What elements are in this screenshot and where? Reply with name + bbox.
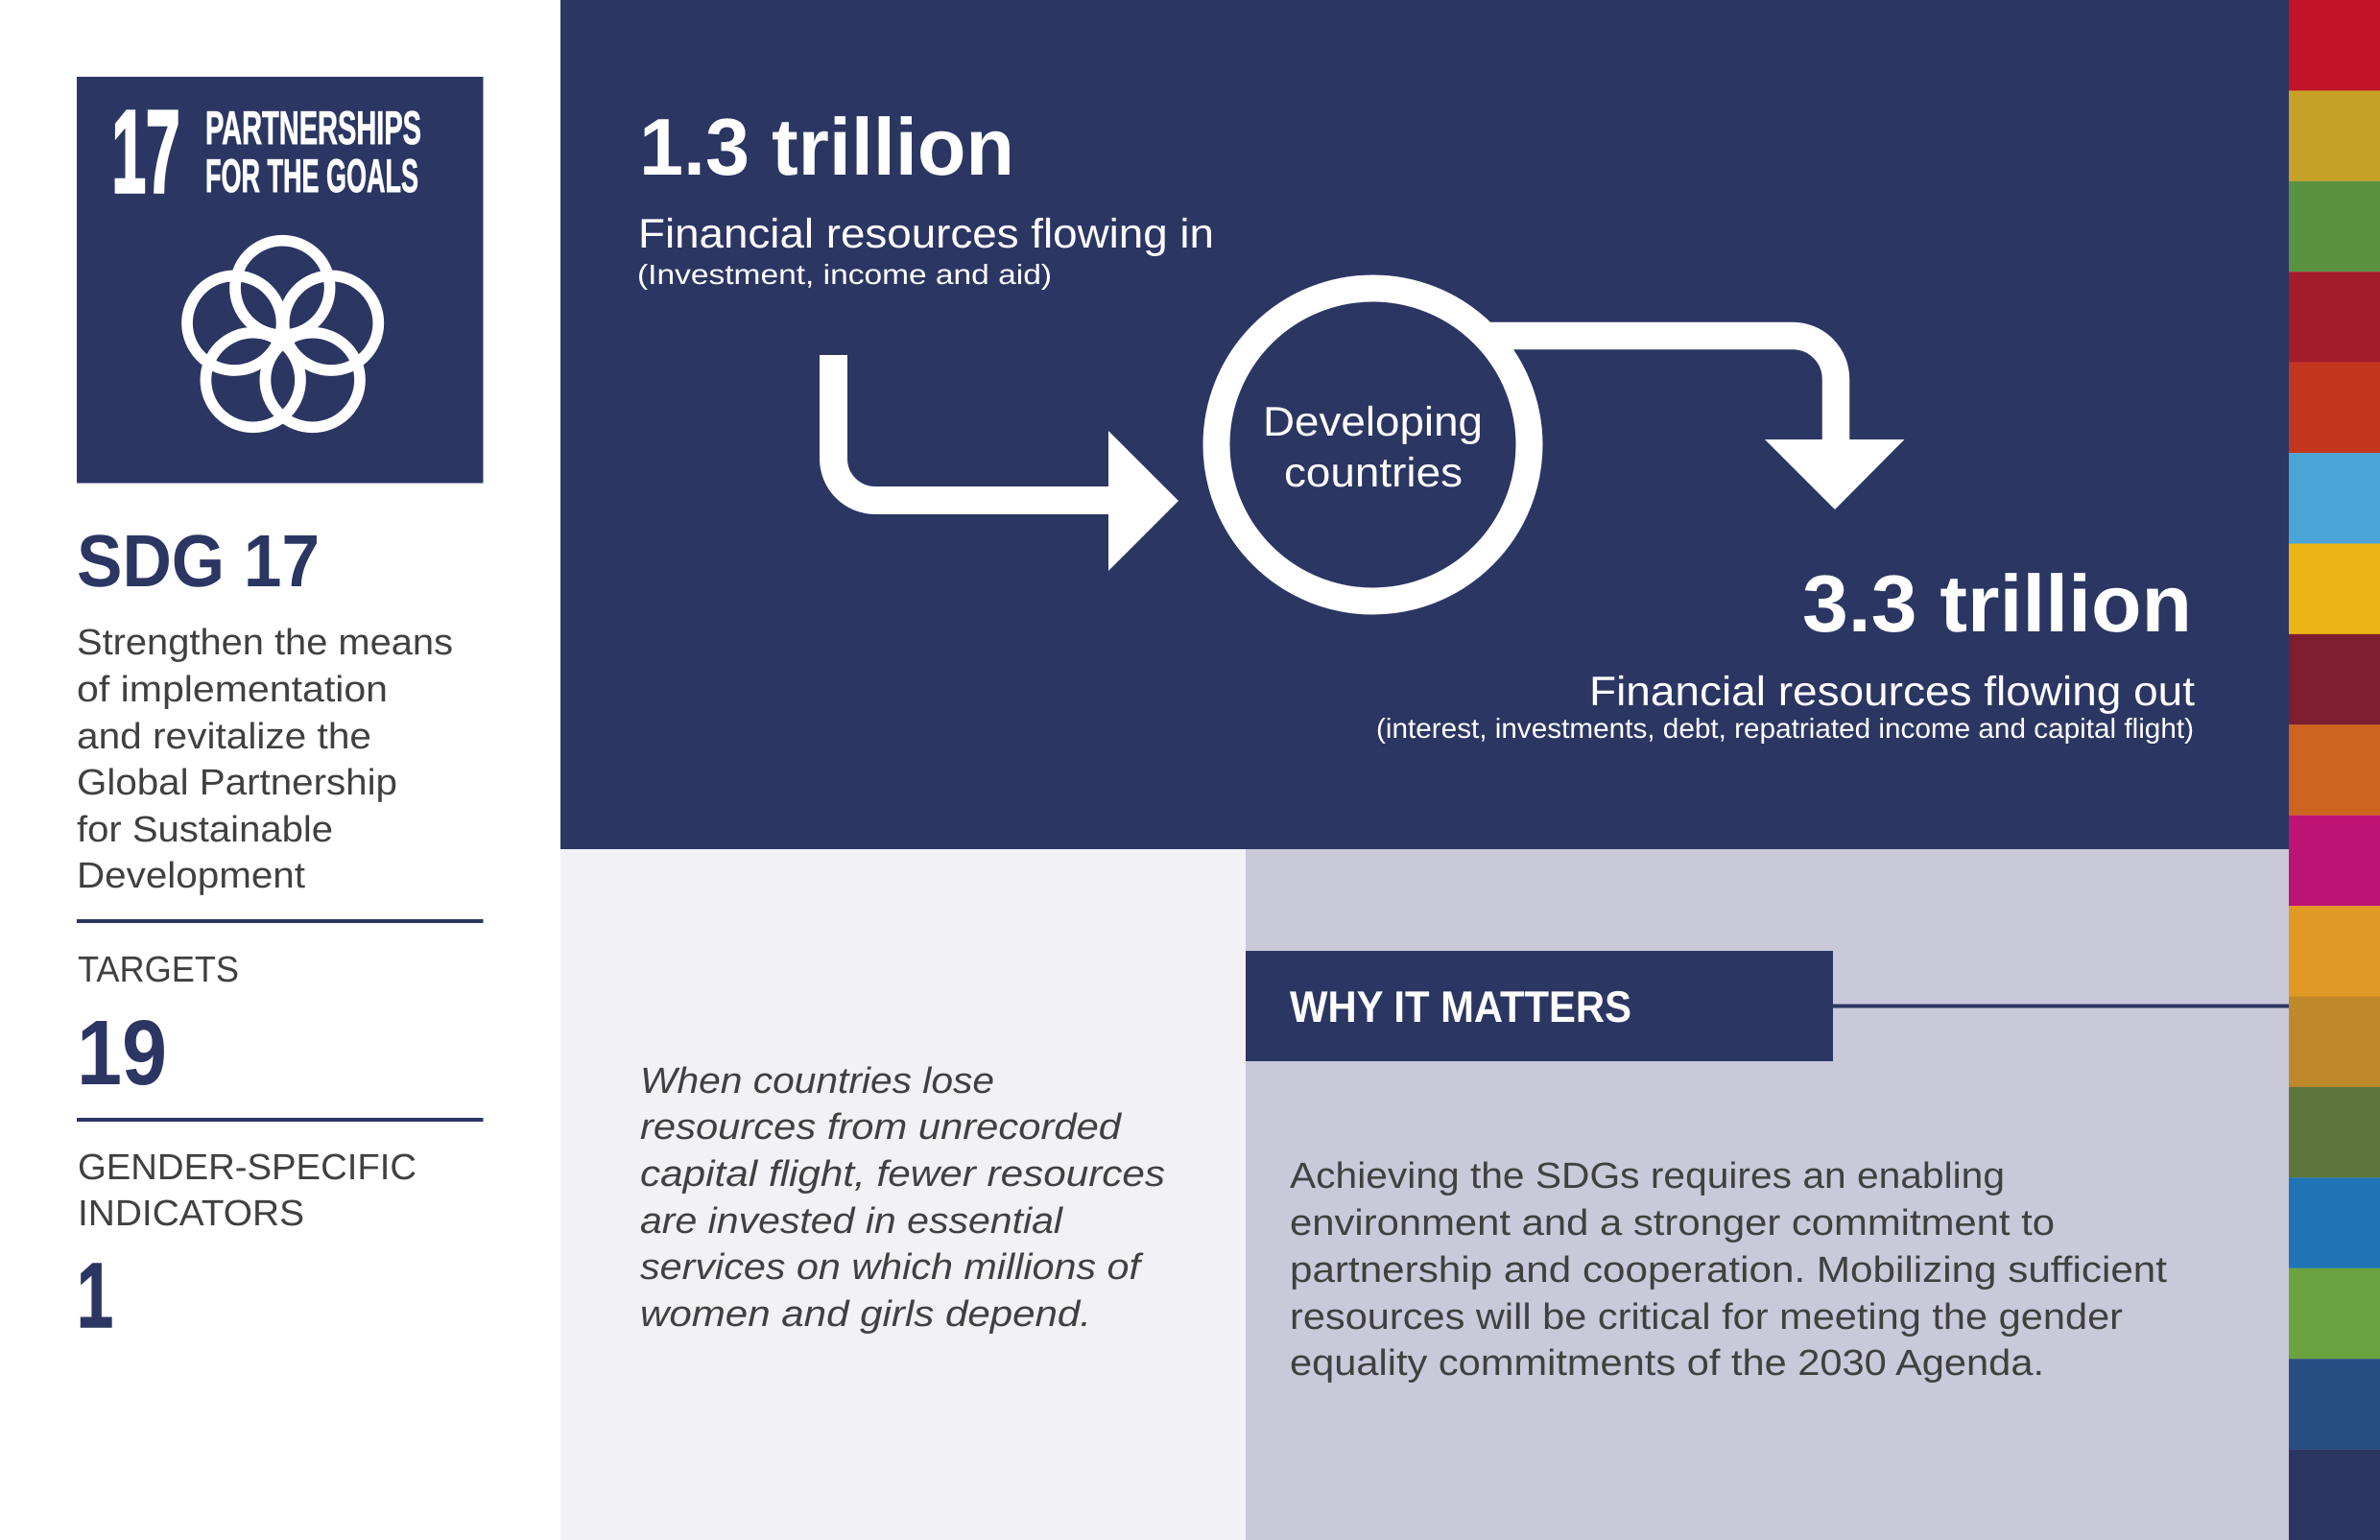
goal description: and revitalize the: [77, 717, 371, 757]
panel: why it matters: [1246, 849, 2289, 1540]
arrow: outflow from circle: [1486, 336, 1904, 509]
explanation text: partnership and cooperation. Mobilizing sufficient: [1290, 1250, 2167, 1291]
outflow detail: (interest, investments, debt, repatriated income and capital flight): [1376, 714, 2194, 745]
italic statement: [640, 1061, 1165, 1335]
indicators value: 1: [77, 1244, 113, 1347]
italic statement: resources from unrecorded: [640, 1107, 1123, 1148]
SDG colour stripe: [2289, 0, 2380, 1540]
heading: SDG 17: SDG 17: [77, 520, 320, 603]
goal description: of implementation: [77, 670, 388, 710]
arrow: inflow into circle: [833, 355, 1178, 571]
outflow label: Financial resources flowing out: [1589, 669, 2195, 715]
gender-specific indicators label: GENDER-SPECIFIC: [78, 1148, 416, 1188]
heading banner: WHY IT MATTERS: [1290, 982, 1631, 1031]
explanation text: Achieving the SDGs requires an enabling: [1290, 1156, 2005, 1196]
goal description: Global Partnership: [77, 763, 397, 803]
gender-specific indicators label: INDICATORS: [78, 1194, 304, 1234]
connector line: [1833, 1004, 2289, 1007]
outflow figure: 3.3 trillion: [1802, 558, 2192, 649]
goal description: Strengthen the means: [77, 623, 453, 663]
logo title: PARTNERSHIPS: [205, 103, 421, 154]
explanation text: environment and a stronger commitment to: [1290, 1203, 2055, 1244]
explanation text: equality commitments of the 2030 Agenda.: [1290, 1343, 2044, 1384]
italic statement: are invested in essential: [640, 1201, 1064, 1242]
italic statement: When countries lose: [640, 1061, 994, 1102]
sidebar panel: [0, 0, 560, 1540]
heading banner: [1246, 951, 1833, 1061]
circle: developing countries: countries: [1284, 450, 1463, 496]
gender-specific indicators label: [78, 1148, 416, 1234]
SDG 17 logo tile: [77, 77, 484, 484]
explanation text: resources will be critical for meeting the gender: [1290, 1297, 2123, 1338]
goal description: Development: [77, 856, 305, 896]
circle: developing countries: [1217, 288, 1530, 601]
logo number: 17: [111, 86, 180, 217]
inflow label: Financial resources flowing in: [638, 211, 1214, 257]
icon: five interlocking rings: [187, 241, 378, 427]
targets value: 19: [77, 1002, 167, 1104]
italic statement: services on which millions of: [640, 1247, 1144, 1288]
panel: financial flows: [560, 0, 2289, 849]
italic statement: capital flight, fewer resources: [640, 1154, 1165, 1195]
goal description: for Sustainable: [77, 810, 333, 850]
logo title: [205, 103, 421, 202]
circle: developing countries: Developing: [1263, 399, 1483, 445]
targets label: TARGETS: [78, 950, 239, 990]
panel: capital flight quote: [560, 849, 1246, 1540]
italic statement: women and girls depend.: [640, 1294, 1091, 1335]
goal description: [77, 623, 453, 896]
inflow figure: 1.3 trillion: [639, 102, 1014, 192]
inflow detail: (Investment, income and aid): [637, 260, 1052, 291]
logo title: FOR THE GOALS: [205, 151, 418, 202]
explanation text: [1290, 1156, 2167, 1384]
